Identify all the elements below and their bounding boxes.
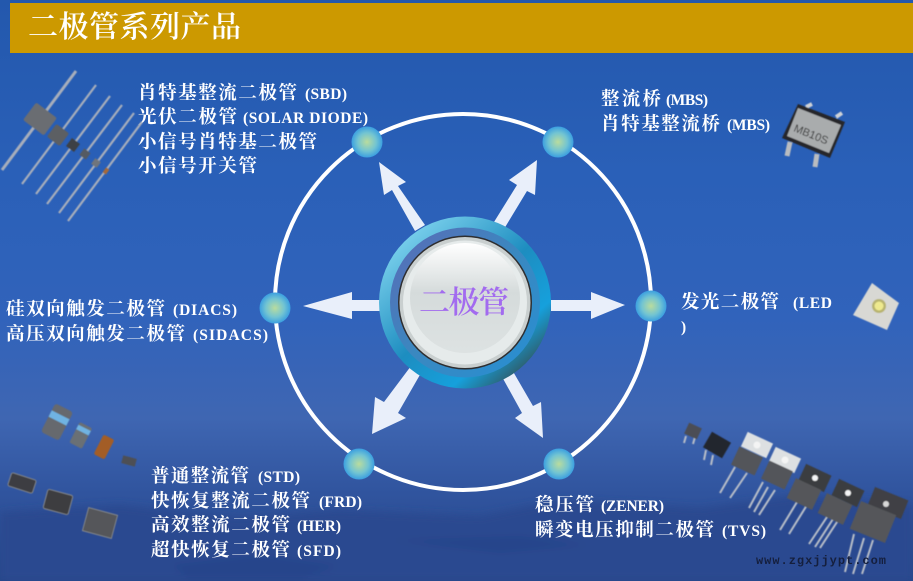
labels: top-right: 肖特基整流桥 <box>601 110 720 136</box>
labels: top-left <box>138 79 368 178</box>
labels: LED <box>681 288 832 336</box>
labels: top-right: (MBS) <box>666 92 708 109</box>
central button <box>379 216 551 388</box>
labels: top-right: 整流桥 <box>601 85 661 111</box>
labels: LED: 发光二极管 <box>681 288 779 314</box>
central button: 二极管 <box>419 277 509 322</box>
horizon landscape <box>0 495 913 581</box>
labels: LED: ) <box>681 319 686 336</box>
title bar <box>10 2 913 53</box>
labels: top-left: (SBD) <box>305 86 347 103</box>
nodes <box>260 126 666 480</box>
icon: bridge rectifier <box>782 104 845 167</box>
arrows <box>303 160 625 438</box>
icon: bridge rectifier: MB10S <box>792 123 830 147</box>
labels: top-left: 肖特基整流二极管 <box>138 79 297 105</box>
labels: left: (DIACS) <box>173 302 237 319</box>
labels: bottom-left: (STD) <box>258 469 300 486</box>
labels: bottom-left: (SFD) <box>297 543 341 560</box>
labels: left: 硅双向触发二极管 <box>6 295 165 321</box>
labels: bottom-right: 稳压管 <box>535 491 594 517</box>
labels: top-left: 小信号开关管 <box>138 152 257 178</box>
icon: axial diodes <box>2 71 142 221</box>
labels: left: 高压双向触发二极管 <box>6 320 185 346</box>
labels: top-left: 小信号肖特基二极管 <box>138 128 317 154</box>
outer ring <box>275 114 651 490</box>
labels: bottom-left: 快恢复整流二极管 <box>151 487 310 513</box>
labels: top-right: (MBS) <box>727 117 770 134</box>
labels: bottom-left: (FRD) <box>319 494 362 511</box>
labels: bottom-right: (ZENER) <box>601 498 664 515</box>
labels: bottom-right <box>535 491 766 542</box>
labels: bottom-right: 瞬变电压抑制二极管 <box>535 516 714 542</box>
labels: bottom-left: 超快恢复二极管 <box>151 536 290 562</box>
labels: top-right <box>601 85 770 136</box>
labels: bottom-right: (TVS) <box>722 523 766 540</box>
labels: left <box>6 295 268 346</box>
labels: top-left: (SOLAR DIODE) <box>243 110 368 127</box>
labels: LED: (LED <box>793 295 832 312</box>
labels: bottom-left: 普通整流管 <box>151 462 249 488</box>
icon: transistor packages <box>684 423 908 574</box>
labels: left: (SIDACS) <box>193 327 268 344</box>
labels: bottom-left <box>151 462 362 562</box>
watermark: www.zgxjjypt.com <box>756 554 886 568</box>
icon: cylindrical and SMD diodes <box>7 403 137 538</box>
labels: bottom-left: (HER) <box>297 518 341 535</box>
labels: bottom-left: 高效整流二极管 <box>151 511 290 537</box>
title bar: 二极管系列产品 <box>28 2 241 46</box>
labels: top-left: 光伏二极管 <box>138 103 237 129</box>
icon: LED <box>853 283 899 330</box>
